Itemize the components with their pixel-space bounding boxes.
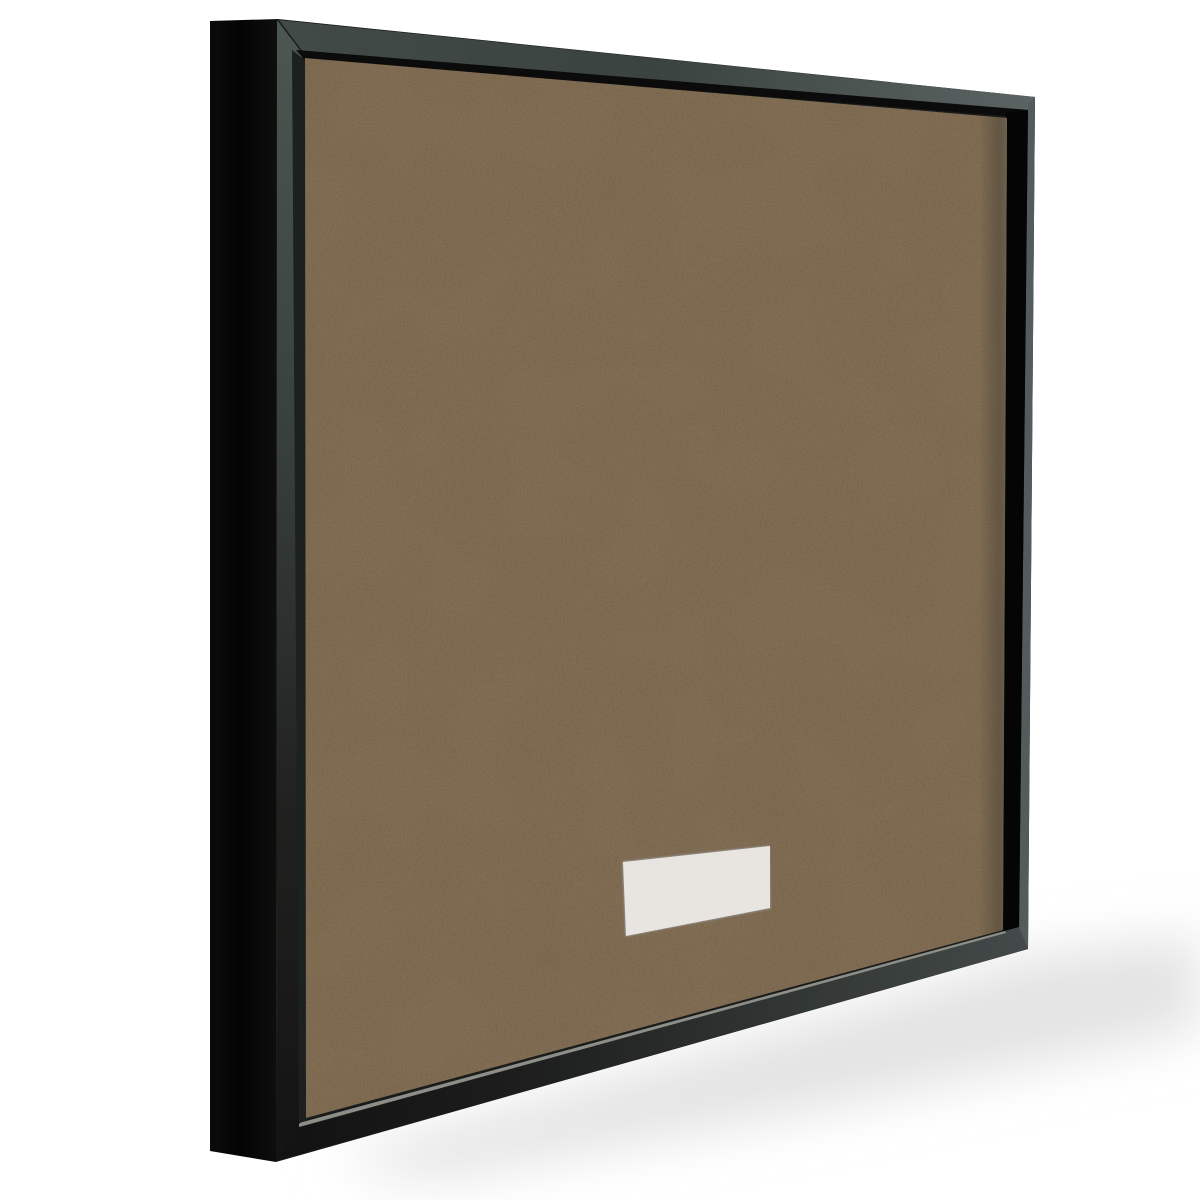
frame (210, 19, 1035, 1162)
frame bottom highlight (299, 931, 1006, 1127)
frame right strip (1019, 97, 1035, 949)
kraft paper backing (305, 58, 1007, 1118)
frame bottom strip (276, 927, 1028, 1161)
frame top inner dark lip (296, 50, 1029, 118)
paper grain (305, 58, 1007, 1118)
frame top strip (279, 20, 1035, 112)
frame right inner black (1002, 111, 1028, 934)
paper mottling (305, 58, 1007, 1118)
paper surface (305, 58, 1007, 1118)
frame left inner dark lip (292, 50, 307, 1124)
frame left strip (276, 20, 302, 1161)
frame side face (210, 19, 278, 1162)
floor shadow (330, 935, 1200, 1180)
frame front face base (276, 19, 1035, 1162)
white label (622, 845, 771, 937)
paper right shadow (979, 116, 1007, 936)
